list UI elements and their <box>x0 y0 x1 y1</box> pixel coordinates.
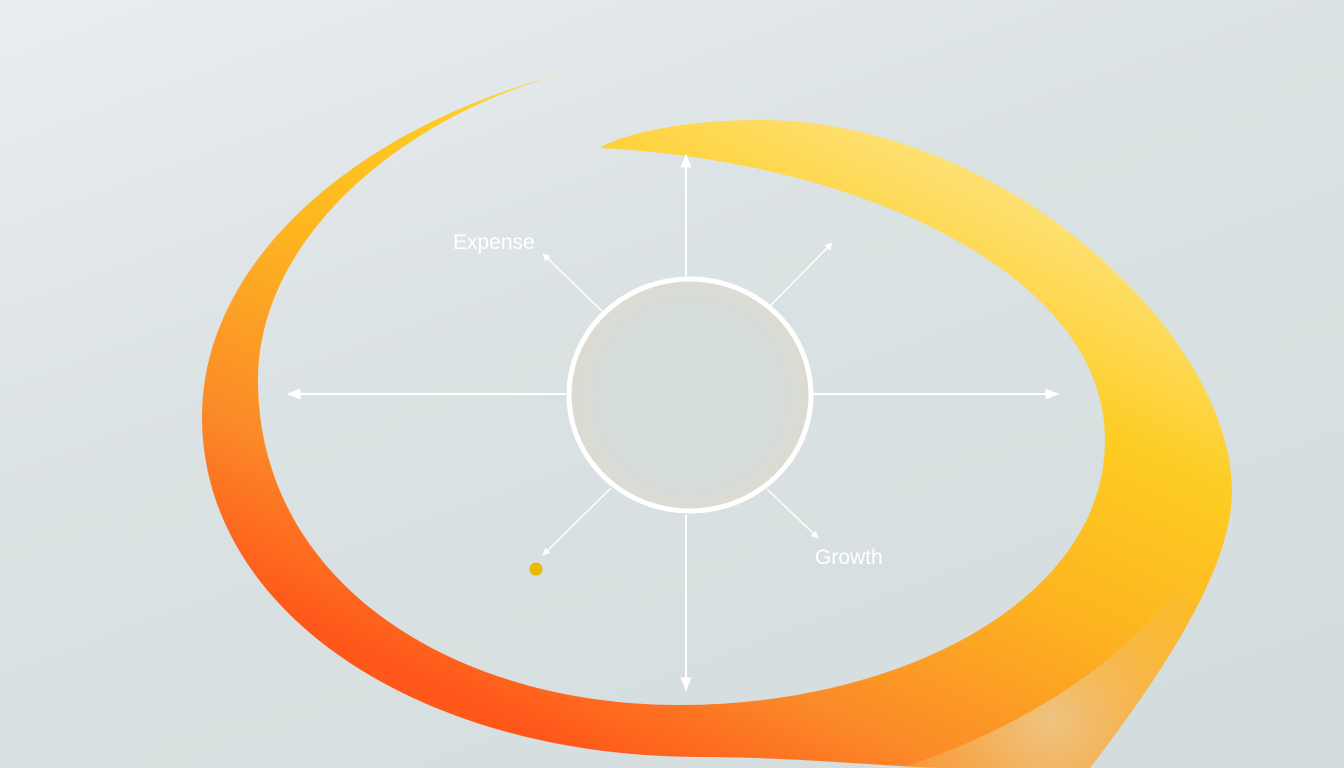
label: Growth: Growth <box>815 546 883 569</box>
center circle <box>569 279 811 511</box>
label: Expense: Expense <box>453 231 535 254</box>
swirl band <box>202 65 1232 768</box>
yellow dot <box>530 562 542 576</box>
arrows <box>288 155 1058 690</box>
